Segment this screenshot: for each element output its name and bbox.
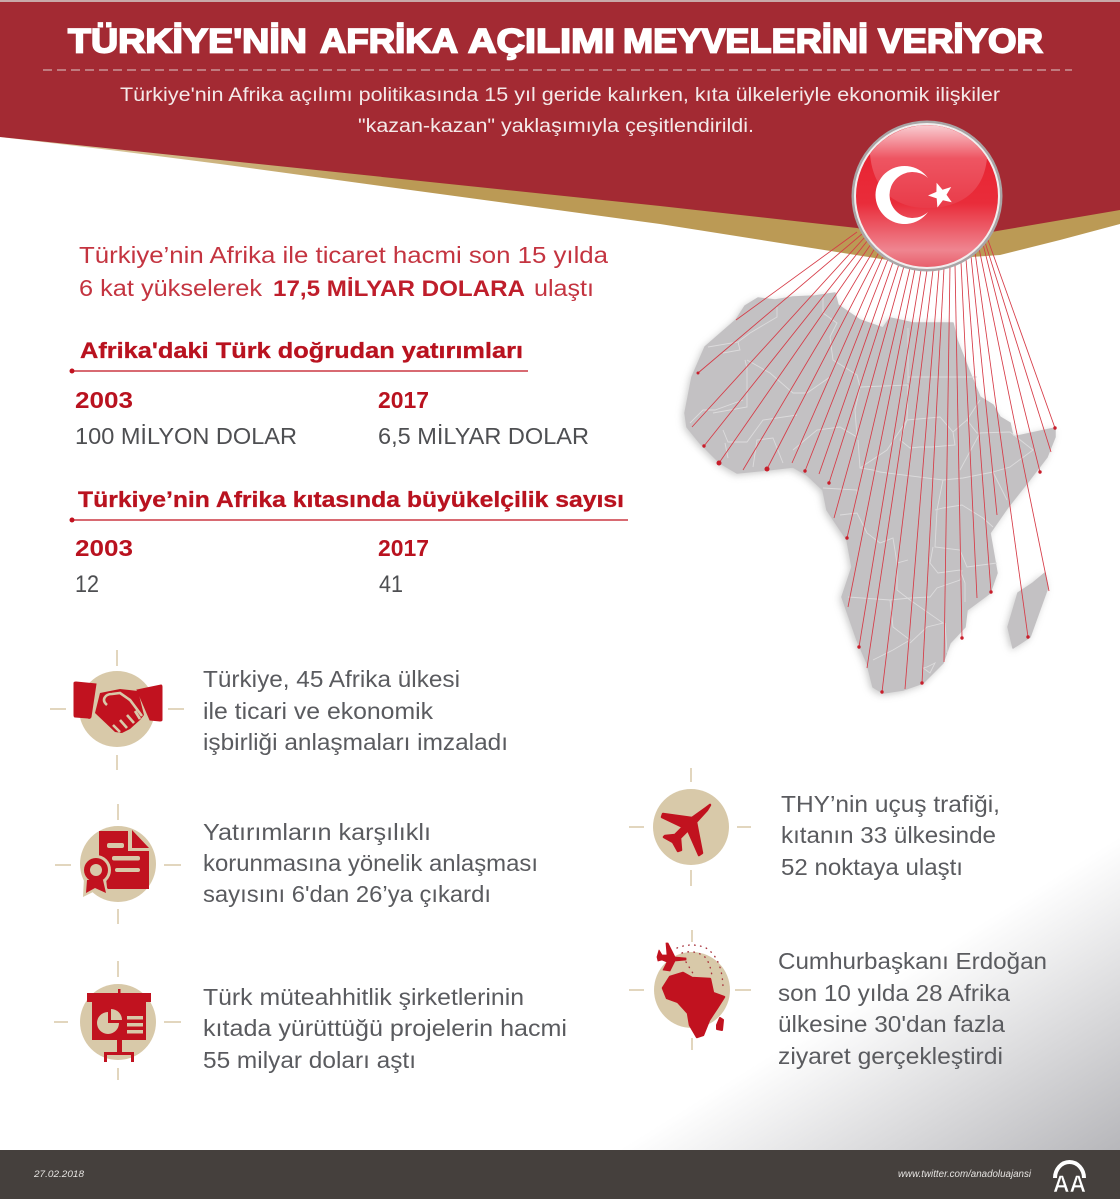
text: presidential visits: ülkesine 30'dan fazla <box>778 1011 1005 1037</box>
title: VERİYOR <box>878 22 1043 60</box>
map of Africa <box>683 293 1055 695</box>
text: investment protection: korunmasına yönelik anlaşması <box>203 850 538 876</box>
icon: Africa globe with airplane <box>629 930 751 1050</box>
text: investment protection <box>203 819 538 907</box>
text: investment protection: Yatırımların karşılıklı <box>203 819 431 845</box>
heading: direct investment: Afrika'daki Türk doğrudan yatırımları <box>80 338 523 363</box>
subtitle <box>120 85 1001 137</box>
text: construction projects: kıtada yürüttüğü projelerin hacmi <box>203 1015 567 1041</box>
panel: Turkish direct investment: 6,5 MİLYAR DOLAR <box>378 423 589 449</box>
text: presidential visits <box>778 948 1047 1069</box>
text: trade agreements: Türkiye, 45 Afrika ülkesi <box>203 666 460 692</box>
title: MEYVELERİNİ <box>623 22 868 60</box>
text: presidential visits: Cumhurbaşkanı Erdoğan <box>778 948 1047 974</box>
icon: airplane <box>629 768 751 886</box>
panel: Turkish direct investment: 2017 <box>378 387 429 413</box>
text: construction projects: Türk müteahhitlik şirketlerinin <box>203 984 524 1010</box>
intro statement: ulaştı <box>534 275 594 301</box>
rays from flag to African countries <box>692 232 1055 692</box>
title: AFRİKA <box>320 22 458 60</box>
title: AÇILIMI <box>468 22 615 60</box>
icon: handshake <box>50 650 184 770</box>
icon: presentation board <box>54 961 181 1080</box>
footer bar <box>0 1150 1120 1199</box>
twitter address: www.twitter.com/anadoluajansi <box>898 1169 1032 1180</box>
panel: number of embassies: 12 <box>75 571 99 598</box>
gold ribbon <box>0 137 1120 262</box>
ray end points <box>696 372 1057 694</box>
text: construction projects <box>203 984 567 1073</box>
subtitle: Türkiye'nin Afrika açılımı politikasında 15 yıl geride kalırken, kıta ülkeleriyle ekonomik ilişkiler <box>120 85 1001 106</box>
text: investment protection: sayısını 6'dan 26’ya çıkardı <box>203 881 491 907</box>
panel: Turkish direct investment: 2003 <box>75 387 133 413</box>
panel: number of embassies: 2003 <box>75 535 133 561</box>
date: 27.02.2018 <box>33 1169 85 1180</box>
text: THY flights <box>781 791 1000 880</box>
text: construction projects: 55 milyar doları aştı <box>203 1047 416 1073</box>
text: presidential visits: ziyaret gerçekleştirdi <box>778 1043 1003 1069</box>
panel: Turkish direct investment <box>70 338 589 449</box>
intro statement <box>79 242 608 301</box>
text: trade agreements: ile ticari ve ekonomik <box>203 698 434 724</box>
panel: number of embassies: 2017 <box>378 535 429 561</box>
icon: certificate document <box>55 804 181 924</box>
intro statement: Türkiye’nin Afrika ile ticaret hacmi son 15 yılda <box>79 242 608 268</box>
title: TÜRKİYE'NİN <box>68 22 307 60</box>
text: presidential visits: son 10 yılda 28 Afrika <box>778 980 1010 1006</box>
heading: embassies: Türkiye’nin Afrika kıtasında büyükelçilik sayısı <box>78 487 624 512</box>
panel: number of embassies <box>70 487 628 598</box>
panel: Turkish direct investment: 100 MİLYON DOLAR <box>75 423 297 449</box>
icon: Turkish flag sphere <box>852 120 1002 272</box>
intro statement: 17,5 MİLYAR DOLARA <box>273 276 525 301</box>
red header banner <box>0 2 1120 245</box>
title <box>68 22 1043 60</box>
panel: number of embassies: 41 <box>379 571 403 598</box>
text: trade agreements <box>203 666 508 755</box>
text: THY flights: kıtanın 33 ülkesinde <box>781 822 996 848</box>
text: THY flights: THY’nin uçuş trafiği, <box>781 791 1000 817</box>
intro statement: 6 kat yükselerek <box>79 275 263 301</box>
logo: Anadolu Agency: AA <box>1053 1171 1086 1198</box>
text: trade agreements: işbirliği anlaşmaları imzaladı <box>203 729 508 755</box>
text: THY flights: 52 noktaya ulaştı <box>781 854 963 880</box>
subtitle: "kazan-kazan" yaklaşımıyla çeşitlendirildi. <box>358 116 754 137</box>
